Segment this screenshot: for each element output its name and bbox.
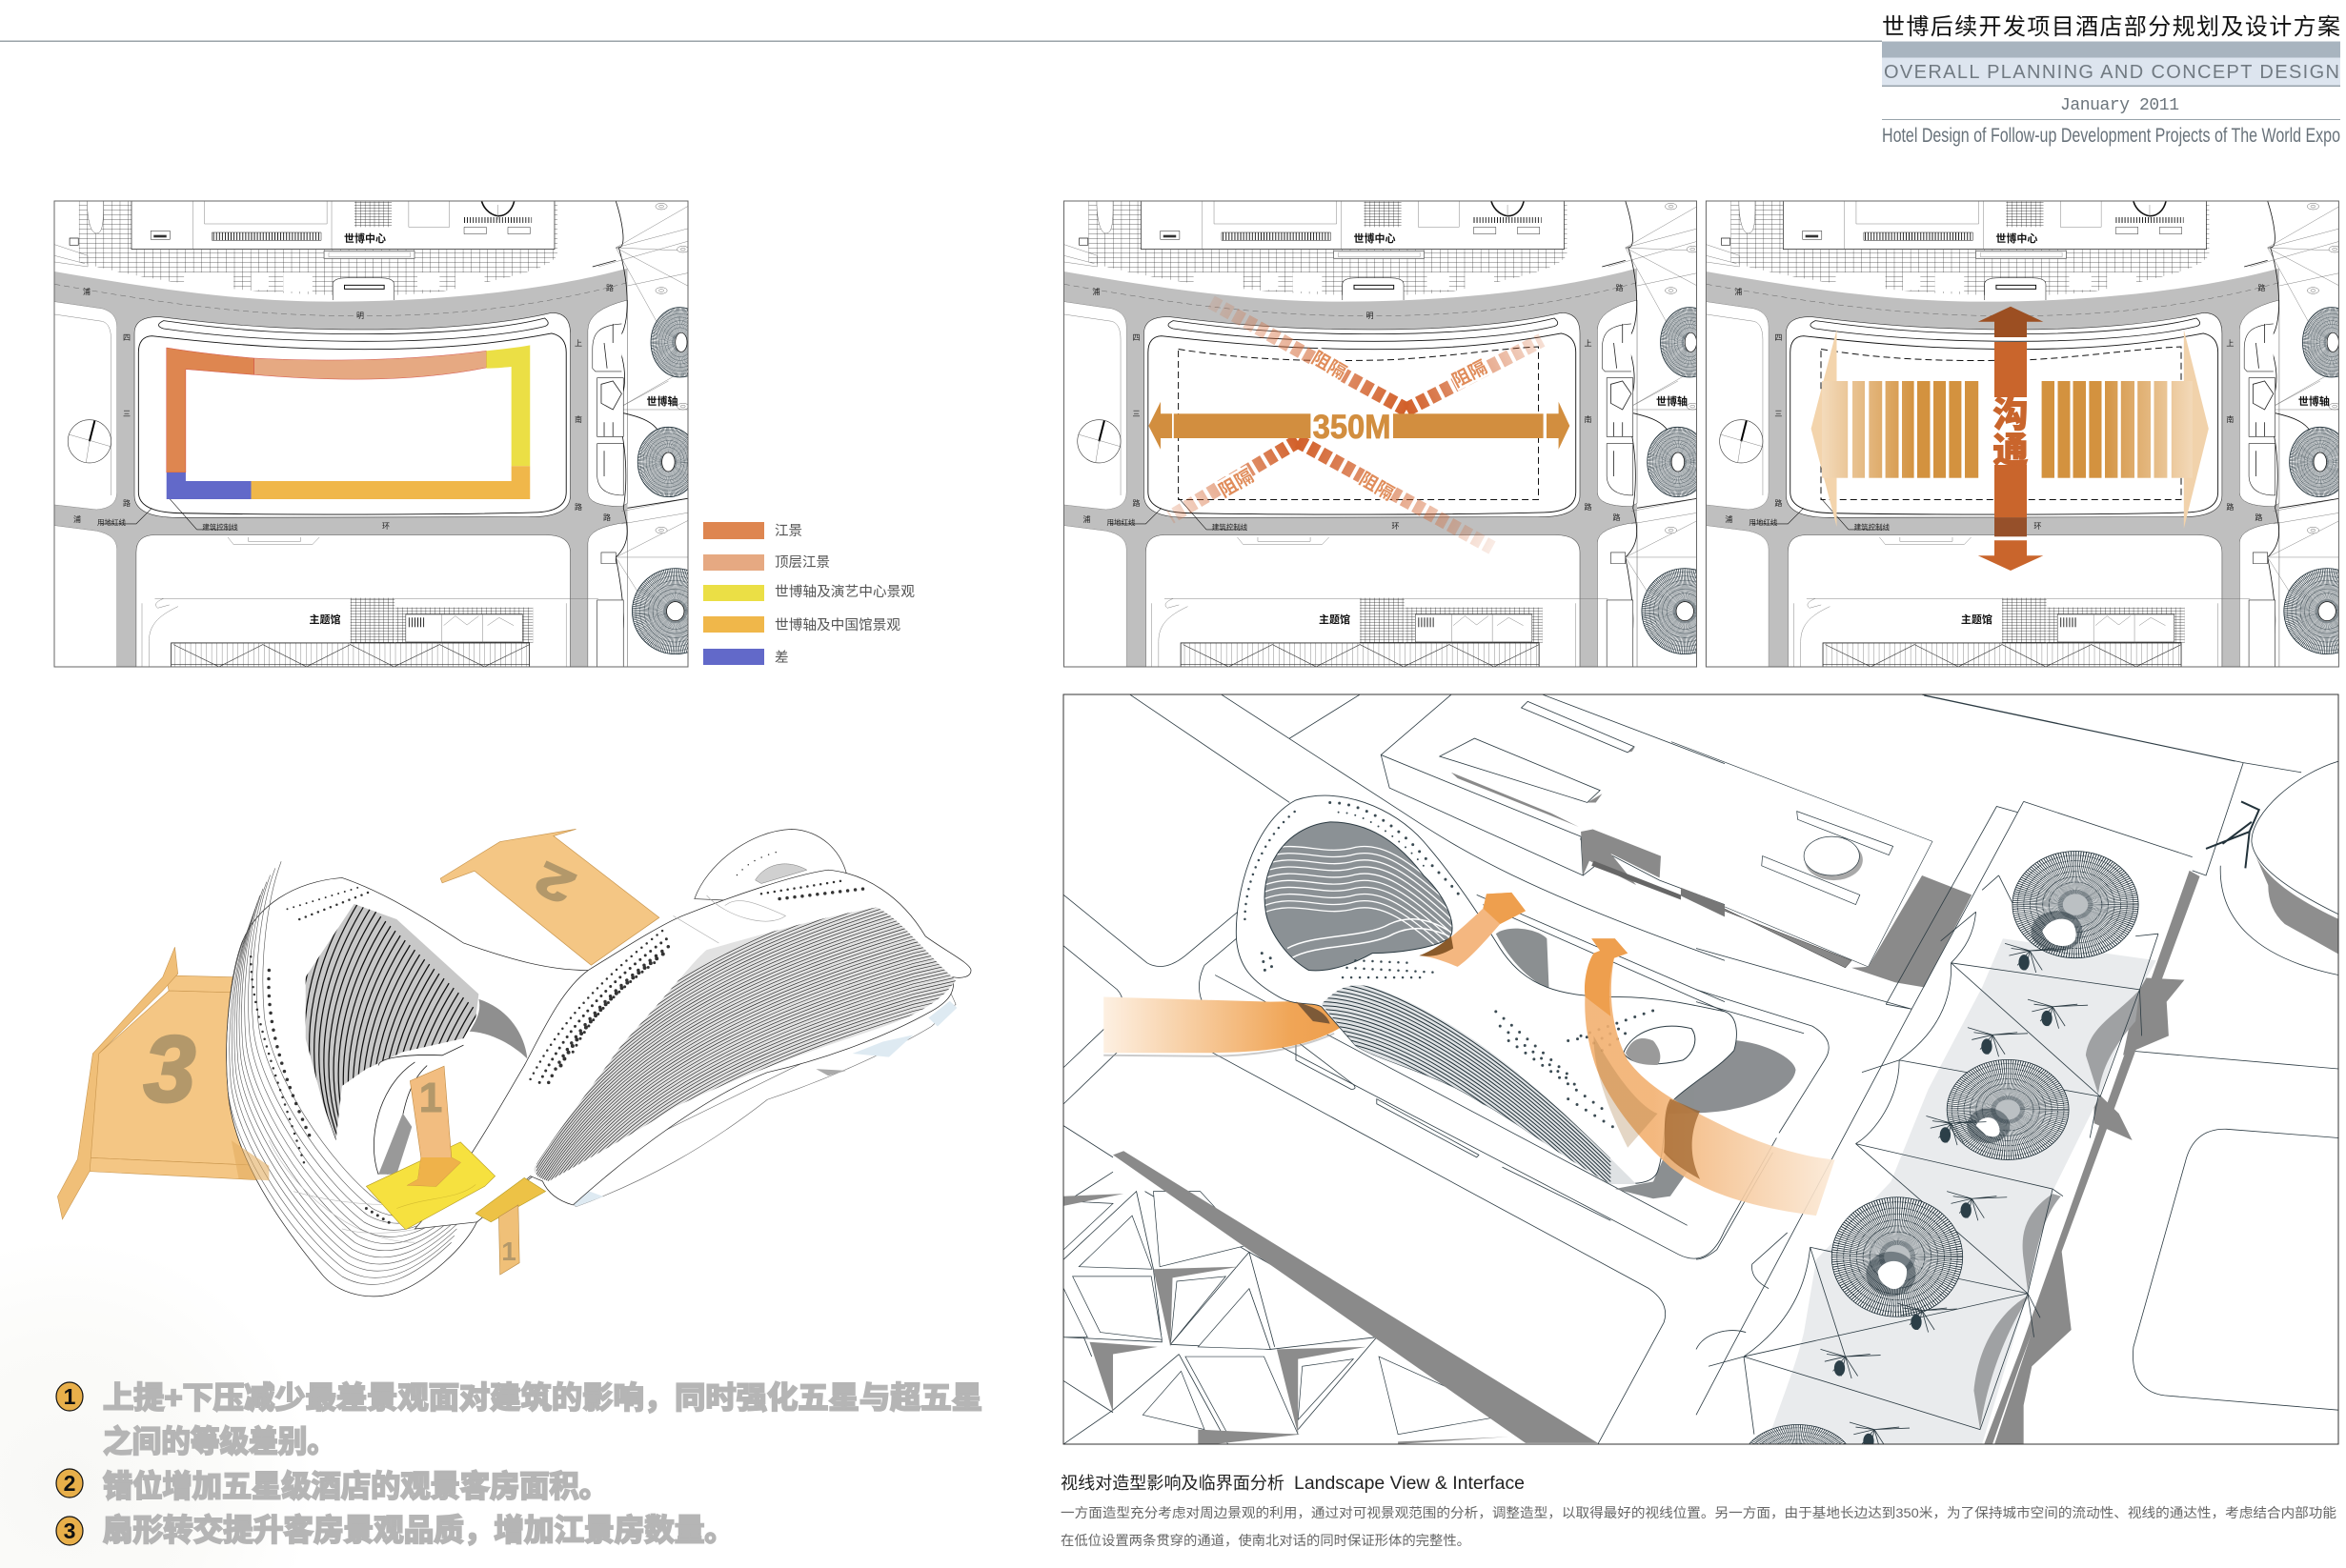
vertical slats left group [1822,381,1978,478]
flow arrow: exit through the loop [1419,893,1526,967]
plate 3 transparent overlap [232,1140,269,1180]
page background glow [0,1219,324,1568]
map 3 labels: 世博中心 [1995,231,2037,245]
mesh canopy 4 [1742,1425,1853,1502]
map 3 labels: 世博轴 [2298,394,2330,408]
second yellow plate [475,1177,546,1222]
map 1 road labels [73,231,678,626]
blocked label lower right: 阻隔 [1356,469,1397,505]
map 2 labels: 上 [1584,339,1591,348]
site lines [1063,694,1725,1444]
header english title: OVERALL PLANNING AND CONCEPT DESIGN [1884,62,2339,83]
arrow: north south communication: 通 [1993,431,2028,470]
low building left end [1381,694,1725,916]
label: communication: 沟 [1993,395,2028,434]
plate 3 [57,947,269,1219]
lower wing louvres [1313,973,1645,1220]
loop opening [1258,817,1458,977]
wing base [555,991,956,1207]
map 1 road labels: 主题馆 [309,613,341,626]
china pavilion lattice [1063,1172,1508,1444]
map 2 labels: 三 [1132,410,1140,418]
membrane roof [1767,938,2156,1444]
legend item: top floor river view [703,554,830,571]
map 1 road labels: 南 [575,414,582,424]
map 2 labels: 主题馆 [1319,613,1350,626]
map 2 labels: 环 [1391,522,1399,531]
blocked label upper right: 阻隔 [1449,356,1490,392]
map 2 labels: 路 [1612,513,1620,522]
legend item: expo axis and china pavilion: 世博轴及中国馆景观 [775,617,901,633]
map 2 labels: 四 [1132,333,1140,342]
central low building [1671,742,1972,987]
map 3 labels: 浦 [1734,287,1742,296]
header [0,14,2340,147]
view band: expo axis and performing arts view [486,345,530,466]
panel: 350M blocking site plan [1064,201,1729,667]
blocked sight line: lower left [1170,441,1298,517]
caption heading english: Landscape View & Interface [1294,1474,1525,1494]
panel: massing diagram [57,829,986,1297]
loop shadow [470,999,527,1058]
panel: communication site plan [1707,201,2346,667]
building body [1236,795,1736,1183]
header title chinese: 世博后续开发项目酒店部分规划及设计方案 [1882,14,2340,40]
building control dashed outline [1821,347,2181,499]
right side site lines [1922,694,2338,1410]
cable fan nodes [1820,943,2088,1452]
arrow: left fade [1811,330,1837,527]
point 1 badge: 1 [64,1384,76,1409]
arrow: 350M span [1148,402,1569,450]
site plinth around the building [1199,895,1776,1258]
caption body line 1: 一方面造型充分考虑对周边景观的利用，通过对可视景观范围的分析，调整造型，以取得最好的视线位置。另一方面，由于基地长边达到350米，为了保持城市空间的流动性、视线的通达性，考虑结合内部功能 [1061,1505,2336,1520]
map 1 road labels: 环 [382,522,390,531]
view band: top floor river view [254,351,486,379]
building control dashed outline [1179,347,1538,499]
point 2 badge: 2 [64,1471,75,1496]
map 1 road labels: 路 [123,498,131,508]
legend item: river view [703,522,802,539]
axis band and scalloped shadows [1984,871,2200,1444]
arrow: north south communication [1978,307,2043,571]
blocked label upper left: 阻隔 [1308,348,1349,384]
map 2 labels [1082,231,1688,626]
header band [1882,42,2340,57]
wing louvres [524,865,986,1273]
map 1 road labels: 世博中心 [344,231,386,245]
legend item: poor view [703,649,789,666]
perforations on aerial ribbon [1244,802,1657,1128]
loop louvres [280,864,497,1282]
legend item: expo axis and performing arts [703,584,916,601]
view band: poor view [167,472,252,499]
caption body line 2: 在低位设置两条贯穿的通道，使南北对话的同时保证形体的完整性。 [1061,1533,1470,1548]
map 3 labels [1725,231,2330,626]
rear arch of the building [695,829,846,902]
mesh canopy 2 [1947,1059,2069,1159]
map 3 labels: 建筑控制线 [1854,522,1891,532]
map 3 labels: 路 [2226,502,2234,512]
map 1 road labels: 明 [356,312,364,320]
legend item: river view: 江景 [775,523,802,539]
flow arrow shadow left [1103,1034,1334,1056]
arrow: right fade [2184,330,2209,529]
key points text [56,1380,982,1547]
left loop of building [227,877,588,1297]
350M label: 350M [1313,409,1391,446]
blocked sight line: upper right [1406,340,1542,410]
map 1 road labels: 三 [123,410,131,418]
legend [703,522,916,666]
blocked label lower left: 阻隔 [1216,466,1257,502]
panel: aerial perspective [1063,694,2338,1502]
point 3 badge: 3 [64,1518,75,1543]
map 2 labels: 世博轴 [1656,394,1688,408]
right wing of building [415,870,971,1229]
map 1 road labels: 路 [575,502,582,512]
panel: view zones site plan [54,201,718,667]
map 3 labels: 三 [1774,410,1782,418]
map 1 road labels: 世博轴 [646,394,678,408]
map 1 road labels: 路 [603,513,611,522]
flow arrow: west entry [1103,997,1343,1053]
map 1 frame [54,201,688,667]
map 2 labels: 用地红线 [1107,517,1136,527]
point 3 text: 扇形转交提升客房景观品质，增加江景房数量。 [103,1513,735,1547]
map 3 labels: 环 [2033,522,2041,531]
map 1 road labels: 浦 [73,514,81,524]
right pavilion [2206,761,2338,975]
map 1 road labels: 用地红线 [97,517,126,527]
small plate 1 number: 1 [501,1236,516,1266]
map 2 labels: 浦 [1082,514,1090,524]
view band: expo axis and china pavilion view [252,466,530,499]
map 2 labels: 浦 [1092,287,1100,296]
map 1 road labels: 建筑控制线 [202,522,238,532]
caption: landscape view and interface [1061,1474,2336,1548]
legend item: expo axis and china pavilion [703,616,901,633]
point 1 text second line: 之间的等级差别。 [103,1424,336,1458]
map 2 labels: 明 [1366,312,1374,320]
mesh canopy 3 [1831,1197,1963,1317]
point 2 text: 错位增加五星级酒店的观景客房面积。 [103,1469,609,1503]
caption heading: 视线对造型影响及临界面分析 [1061,1474,1284,1493]
map 1 road labels: 四 [123,333,131,342]
legend item: expo axis and performing arts: 世博轴及演艺中心景观 [775,584,916,600]
plate 2 number: 2 [527,852,582,915]
legend item: top floor river view: 顶层江景 [775,554,830,571]
vertical slats right group [2042,381,2193,478]
map 3 labels: 南 [2226,414,2234,424]
legend item: poor view: 差 [775,650,789,666]
map 3 labels: 路 [2255,513,2262,522]
map 3 frame [1706,201,2338,667]
view band: river view [167,348,254,472]
map 2 frame [1063,201,1696,667]
map 2 labels: 建筑控制线 [1212,522,1248,532]
point 1 text: 上提+下压减少最差景观面对建筑的影响，同时强化五星与超五星 [103,1380,982,1415]
map 3 labels: 路 [2257,283,2265,292]
plate 1 number: 1 [419,1075,442,1121]
axis shadow band [1113,1151,1598,1443]
plate 3 number: 3 [144,1016,195,1121]
membrane scallops [1973,990,2139,1430]
plate 1 yellow [366,1142,495,1230]
map 3 labels: 主题馆 [1961,613,1992,626]
flow arrow: south east [1585,938,1835,1216]
map 3 labels: 浦 [1725,514,1732,524]
point 3 badge [56,1517,83,1545]
blocked sight line: upper left [1211,302,1406,410]
map 2 labels: 路 [1132,498,1140,508]
map 2 labels: 世博中心 [1353,231,1395,245]
plate 2 [440,829,659,965]
perforations [251,852,864,1225]
map 3 labels: 上 [2226,339,2234,348]
map 3 labels: 四 [1774,333,1782,342]
map 1 road labels: 上 [575,339,582,348]
blocked sight line: lower right [1298,441,1492,548]
mesh canopy 1 [2012,851,2138,958]
map 3 labels: 用地红线 [1749,517,1778,527]
map 1 road labels: 路 [606,283,614,292]
map 1 road labels: 浦 [83,287,91,296]
map 2 labels: 南 [1584,414,1591,424]
header date: January 2011 [2060,96,2179,115]
map 2 labels: 路 [1616,283,1624,292]
building shadows [1411,856,1796,1198]
small opening [1624,1026,1695,1064]
map 3 labels: 路 [1774,498,1782,508]
map 2 labels: 路 [1584,502,1591,512]
aerial frame [1063,694,2338,1444]
small plate 1 [498,1205,519,1275]
plaza outlines [1696,801,2193,1415]
point 1 badge [56,1382,83,1411]
point 2 badge [56,1469,83,1498]
tension cables [1709,875,2158,1435]
